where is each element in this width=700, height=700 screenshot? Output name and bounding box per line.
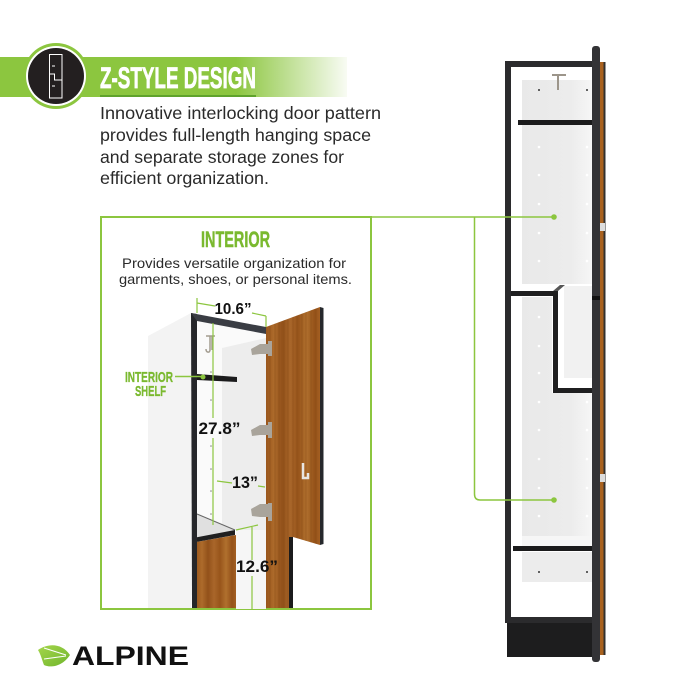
frame — [191, 313, 197, 608]
dimension lines — [197, 298, 266, 609]
peg holes — [538, 146, 588, 517]
peg holes — [210, 371, 212, 515]
door handle — [303, 463, 308, 478]
dimension: height: 27.8” — [198, 419, 240, 438]
latches — [600, 223, 605, 231]
lower door — [196, 535, 236, 608]
z-shaped divider — [511, 291, 592, 393]
dimension: width: 10.6” — [214, 301, 252, 318]
wordmark: ALPINE — [72, 641, 189, 671]
connector to lower compartment — [474, 217, 557, 503]
top shelf — [518, 120, 592, 125]
callout: interior shelf: SHELF — [135, 384, 166, 400]
title underline — [100, 95, 256, 97]
panel border — [101, 217, 371, 609]
description text: efficient organization. — [100, 168, 269, 188]
hanging hook — [552, 75, 566, 90]
locker interior walls — [197, 316, 266, 530]
dimension: lower height: 12.6” — [236, 557, 278, 576]
locker interior — [511, 67, 592, 617]
interior shelf — [197, 374, 237, 382]
description text: Innovative interlocking door pattern — [100, 103, 381, 123]
description text: and separate storage zones for — [100, 147, 344, 167]
door edge — [592, 46, 600, 662]
icon: leaf — [38, 645, 70, 666]
icon: z-style locker badge — [23, 43, 89, 109]
locker side panel — [148, 313, 191, 608]
green title bar — [0, 57, 347, 97]
plinth — [507, 623, 593, 657]
interior description: Provides versatile organization for — [122, 255, 346, 271]
panel: interior — [101, 217, 371, 609]
hinges — [251, 341, 272, 521]
connector to upper compartment — [371, 214, 557, 220]
upper door — [266, 307, 320, 608]
locker wood side — [600, 62, 604, 655]
heading: Z-Style Design: Z-STYLE DESIGN — [100, 62, 256, 95]
description text: provides full-length hanging space — [100, 125, 371, 145]
locker floor — [513, 582, 593, 617]
callout: interior shelf — [125, 370, 206, 400]
heading: Interior: INTERIOR — [201, 227, 270, 252]
wood grain — [270, 305, 316, 608]
interior description: garments, shoes, or personal items. — [119, 271, 352, 287]
logo: Alpine — [38, 641, 189, 671]
locker frame — [505, 61, 593, 623]
header banner — [0, 57, 347, 97]
dimension: depth: 13” — [232, 473, 258, 492]
open locker photo — [148, 298, 324, 609]
bottom shelf — [513, 546, 593, 551]
coat hook — [206, 336, 215, 352]
full locker photo — [505, 46, 606, 662]
callout: interior shelf: INTERIOR — [125, 370, 173, 386]
